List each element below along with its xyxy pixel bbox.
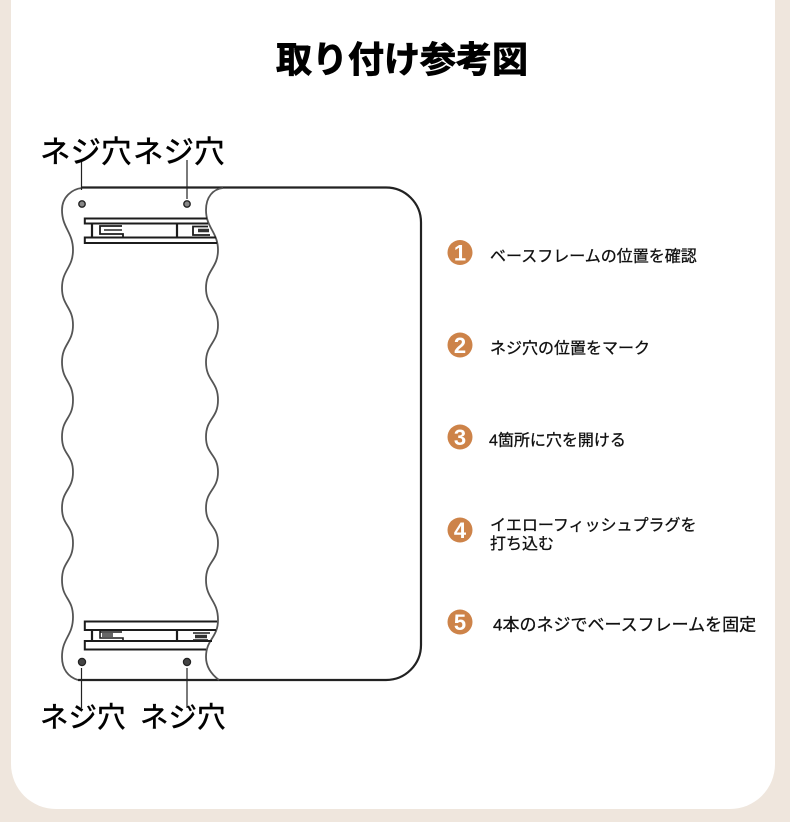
step 5: 4本のネジでベースフレームを固定 <box>493 616 756 634</box>
labels: screw holes: ネジ穴 <box>40 136 132 170</box>
step 4: 打ち込む <box>490 535 554 553</box>
step 4: 4 <box>454 518 467 543</box>
step 4: イエローフィッシュプラグを <box>490 516 697 534</box>
step 5: 5 <box>454 610 466 635</box>
step 3 <box>448 424 626 450</box>
diagram: base frame mounting <box>40 136 421 734</box>
step 2: ネジ穴の位置をマーク <box>490 340 650 358</box>
leader lines and screw holes <box>78 160 191 708</box>
frame outline <box>62 188 421 680</box>
title: 取り付け参考図 <box>276 39 528 80</box>
step 1: 1 <box>454 240 466 266</box>
labels: screw holes: ネジ穴 <box>40 702 126 734</box>
step 2 <box>448 332 650 358</box>
labels: screw holes: ネジ穴 <box>133 136 224 170</box>
step 3: 4箇所に穴を開ける <box>489 432 626 450</box>
labels: screw holes <box>40 136 226 734</box>
labels: screw holes: ネジ穴 <box>140 702 226 734</box>
top bracket <box>85 218 217 243</box>
step 1 <box>448 240 697 266</box>
step 3: 3 <box>454 425 466 450</box>
step 2: 2 <box>454 333 466 358</box>
step 1: ベースフレームの位置を確認 <box>490 248 697 266</box>
step 4 <box>448 516 697 553</box>
bottom bracket <box>85 622 217 650</box>
step 5 <box>448 610 756 635</box>
